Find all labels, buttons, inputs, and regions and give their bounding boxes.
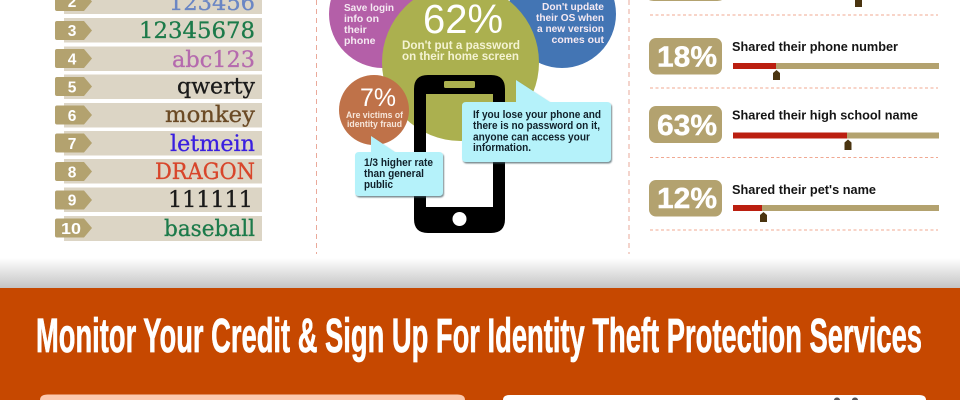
bubble: 7 percent identity fraud: identity fraud bbox=[347, 119, 402, 130]
stat: 63 percent high school name: 63% bbox=[657, 110, 717, 142]
row 6: monkey bbox=[55, 102, 262, 128]
callout: one third higher rate: public bbox=[364, 179, 393, 191]
panel: monitor your credit banner bbox=[0, 288, 960, 400]
row 6: monkey: 6 bbox=[68, 108, 77, 125]
icon: smartphone bbox=[414, 75, 505, 233]
row 8: DRAGON bbox=[55, 159, 262, 185]
row 4: abc123 bbox=[55, 46, 262, 73]
callout: lost phone warning: If you lose your phone and bbox=[473, 109, 601, 121]
bubble: 7 percent identity fraud: Are victims of bbox=[346, 110, 404, 121]
row 4: abc123: 4 bbox=[68, 52, 77, 68]
bubble: 7 percent identity fraud bbox=[339, 75, 409, 145]
bubble: save login info: Save login bbox=[344, 2, 394, 14]
stat: 63 percent high school name bbox=[649, 106, 939, 150]
callout: one third higher rate: than general bbox=[364, 168, 424, 180]
callout: lost phone warning: anyone can access your bbox=[473, 132, 591, 144]
bubble: do not update OS: Don't update bbox=[542, 1, 604, 13]
row 9: 111111: 9 bbox=[68, 192, 77, 210]
stat: 63 percent high school name: Shared their high school name bbox=[732, 108, 918, 122]
bubble: save login info bbox=[329, 0, 413, 68]
row 4: abc123: abc123 bbox=[172, 47, 255, 73]
stat: 18 percent phone number: Shared their phone number bbox=[732, 39, 898, 54]
panel: shared personal information bbox=[649, 0, 939, 230]
stat: 12 percent pet's name: Shared their pet's name bbox=[732, 182, 876, 197]
row 10: baseball: baseball bbox=[164, 216, 255, 242]
callout: one third higher rate bbox=[355, 136, 443, 196]
stat: 18 percent phone number: 18% bbox=[657, 42, 717, 74]
bubble: do not update OS: their OS when bbox=[536, 12, 604, 24]
row 5: qwerty bbox=[55, 74, 262, 100]
bubble: 62 percent no password: on their home screen bbox=[402, 49, 519, 63]
panel: top passwords list bbox=[55, 0, 262, 242]
row 3: 12345678: 3 bbox=[68, 23, 77, 40]
row 9: 111111 bbox=[55, 187, 262, 213]
row 7: letmein bbox=[55, 131, 262, 157]
callout: one third higher rate: 1/3 higher rate bbox=[364, 157, 433, 169]
card: right bbox=[503, 395, 926, 400]
callout: lost phone warning: there is no password on it, bbox=[473, 120, 600, 132]
row 6: monkey: monkey bbox=[165, 102, 255, 128]
stat: 18 percent phone number bbox=[649, 38, 939, 80]
row 3: 12345678 bbox=[55, 18, 262, 44]
bubble: 62 percent no password: Don't put a password bbox=[402, 38, 520, 52]
row 10: baseball: 10 bbox=[61, 221, 81, 238]
row 7: letmein: letmein bbox=[170, 131, 255, 157]
row 8: DRAGON: 8 bbox=[68, 164, 77, 182]
bubble: save login info: their bbox=[344, 24, 367, 36]
bubble: 7 percent identity fraud: 7% bbox=[360, 84, 396, 112]
bubble: save login info: info on bbox=[344, 13, 379, 25]
stat: previous item cut off at top bbox=[649, 0, 862, 7]
bubble: do not update OS: comes out bbox=[551, 34, 604, 46]
stat: 12 percent pet's name: 12% bbox=[657, 183, 717, 215]
panel: smartphone habits bbox=[329, 0, 616, 233]
row 5: qwerty: qwerty bbox=[177, 74, 255, 100]
callout: lost phone warning: information. bbox=[473, 142, 531, 154]
stat: 12 percent pet's name bbox=[649, 180, 939, 222]
row 9: 111111: 111111 bbox=[168, 187, 253, 213]
row 10: baseball bbox=[55, 216, 262, 242]
row 5: qwerty: 5 bbox=[68, 80, 77, 96]
bubble: 62 percent no password bbox=[382, 0, 539, 141]
card: left bbox=[40, 394, 465, 400]
row 2: 123456 bbox=[55, 0, 262, 16]
bubble: do not update OS: a new version bbox=[537, 23, 604, 35]
row 7: letmein: 7 bbox=[68, 136, 76, 153]
row 8: DRAGON: DRAGON bbox=[155, 159, 255, 185]
callout: lost phone warning bbox=[462, 80, 611, 162]
bubble: do not update OS bbox=[508, 0, 616, 68]
row 3: 12345678: 12345678 bbox=[139, 18, 255, 44]
bubble: save login info: phone bbox=[344, 35, 376, 47]
